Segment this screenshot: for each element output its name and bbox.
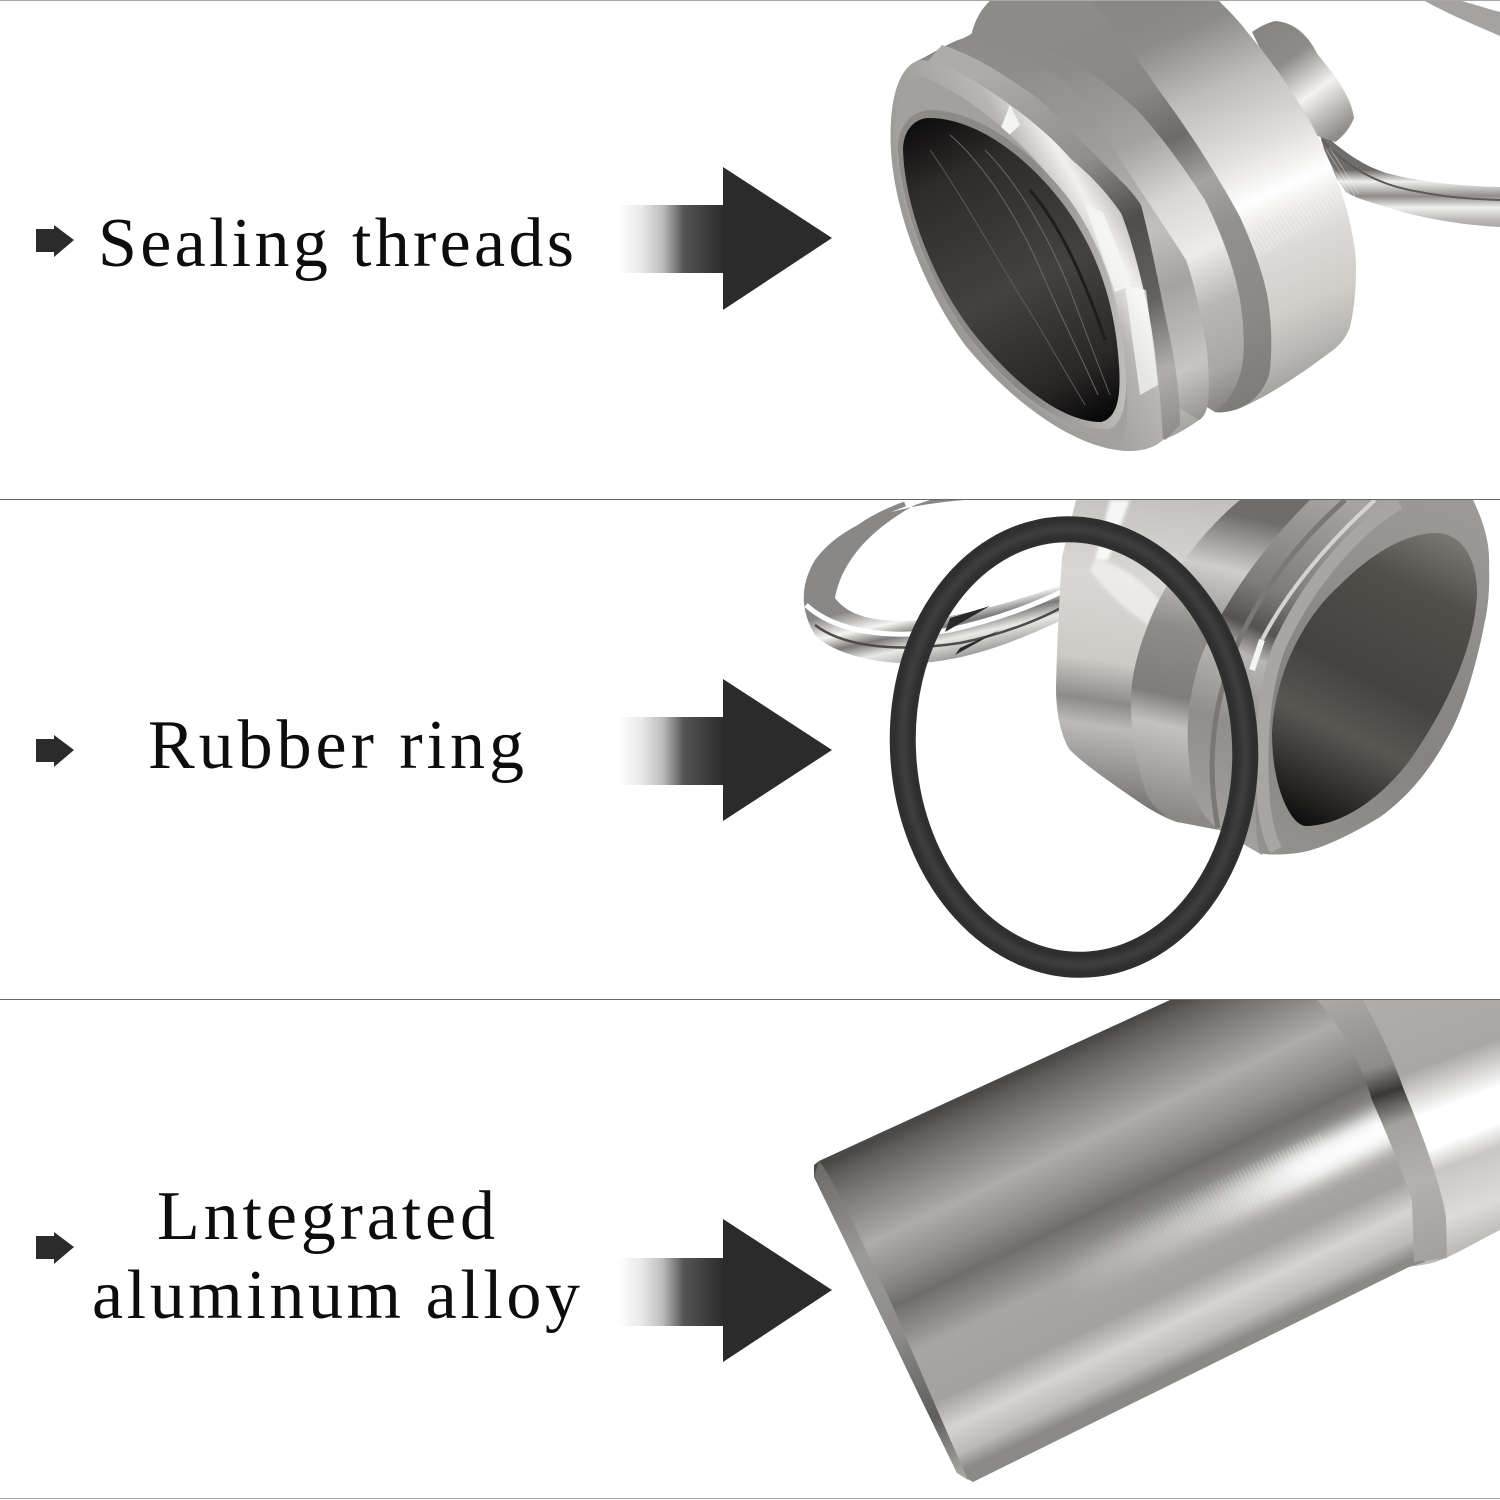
inner chamfer bbox=[898, 110, 1126, 429]
chamfer band bbox=[960, 1, 1271, 412]
thread band outer bbox=[1076, 79, 1244, 420]
tube right section bbox=[1350, 1000, 1500, 1268]
bore bbox=[903, 118, 1120, 422]
label: integrated aluminum alloy bbox=[92, 1178, 580, 1334]
label: sealing threads: Sealing threads bbox=[98, 205, 574, 282]
thread bands bbox=[1188, 500, 1400, 855]
key ring bbox=[804, 500, 1066, 663]
thread groove lines bbox=[1212, 500, 1375, 828]
brushed texture bbox=[1141, 1133, 1336, 1217]
icon: small bullet arrow bbox=[36, 225, 74, 257]
arrow: pointing to ring bbox=[618, 679, 832, 821]
rim highlight bbox=[1262, 503, 1399, 850]
tube main body bbox=[814, 1000, 1425, 1482]
brushed sheen bbox=[1090, 560, 1160, 625]
o-ring bbox=[888, 518, 1260, 976]
bore bbox=[1272, 533, 1477, 826]
product: aluminum tube bbox=[814, 1000, 1500, 1482]
thread groove bbox=[920, 45, 1180, 440]
rim bbox=[1256, 500, 1489, 854]
key ring bbox=[1318, 0, 1500, 227]
rim face bbox=[934, 82, 1127, 418]
front chamfer bbox=[814, 1161, 968, 1480]
rim bbox=[891, 60, 1163, 451]
product: threaded cap with key ring bbox=[891, 0, 1500, 451]
product: cap with o-ring and key ring bbox=[804, 500, 1489, 976]
label: integrated aluminum alloy: Lntegrated bbox=[157, 1178, 495, 1255]
thread band middle bbox=[1105, 158, 1209, 420]
arrow: pointing to tube bbox=[618, 1219, 832, 1362]
panel: integrated aluminum alloy bbox=[36, 1000, 1500, 1482]
arrow: pointing to threads bbox=[618, 167, 832, 310]
cap body bbox=[1056, 500, 1489, 854]
highlight streak bbox=[1092, 1101, 1396, 1276]
panel: rubber ring bbox=[36, 500, 1489, 976]
chamfer band bbox=[1131, 500, 1310, 830]
label: integrated aluminum alloy: aluminum alloy bbox=[92, 1257, 580, 1334]
icon: small bullet arrow bbox=[36, 735, 74, 767]
panel: sealing threads bbox=[36, 0, 1500, 451]
label: rubber ring: Rubber ring bbox=[148, 707, 524, 784]
cap body bbox=[891, 1, 1356, 451]
icon: small bullet arrow bbox=[36, 1232, 74, 1264]
body brushed highlight bbox=[1225, 170, 1345, 245]
white streak bbox=[1095, 500, 1130, 560]
stem bbox=[1252, 21, 1354, 142]
step band bbox=[1317, 1000, 1447, 1262]
rim highlight facets bbox=[1000, 105, 1158, 395]
